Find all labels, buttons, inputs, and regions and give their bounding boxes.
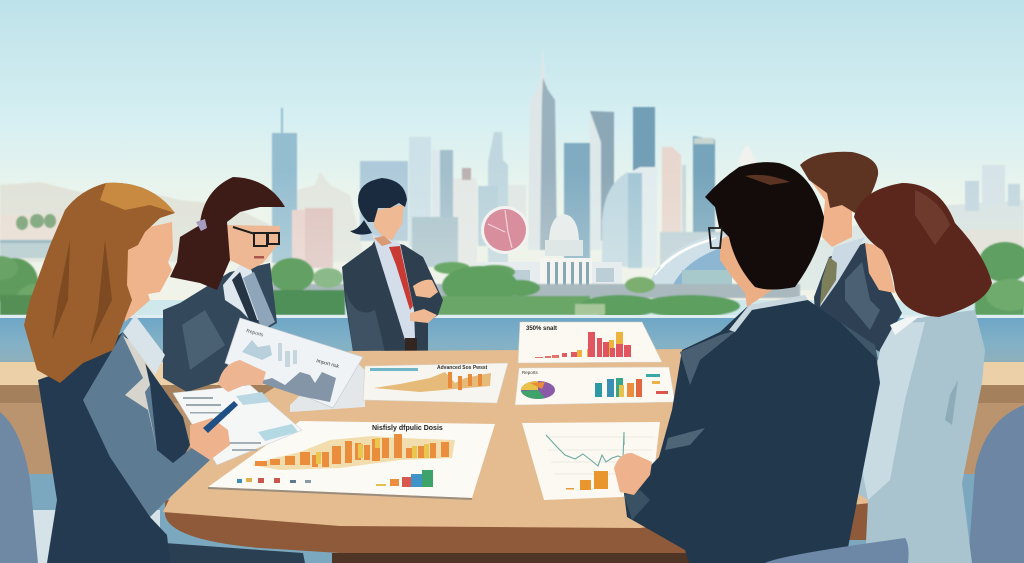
collar bbox=[729, 295, 808, 332]
chart sheet: line chart bbox=[522, 422, 660, 500]
hair bbox=[800, 152, 878, 213]
right chair bbox=[968, 405, 1024, 563]
chart sheet: area and line report bbox=[225, 318, 363, 408]
hand bbox=[614, 453, 652, 495]
chart sheet: large monthly bars: Nisfisly dfpulic Dosis bbox=[372, 425, 443, 432]
chart sheet: pie and bars bbox=[515, 367, 675, 405]
center presenter bbox=[342, 178, 443, 352]
glasses bbox=[233, 227, 279, 246]
chart sheet: 350% bars: 350% snalt bbox=[526, 326, 557, 332]
chart sheet: large monthly bars bbox=[208, 421, 495, 500]
sleeve bbox=[83, 332, 210, 517]
face bbox=[865, 243, 895, 293]
glass dome building bbox=[648, 235, 732, 287]
back counter bbox=[0, 362, 1024, 563]
front chair back bbox=[765, 538, 909, 563]
head bbox=[370, 204, 404, 240]
left woman with long hair bbox=[24, 183, 238, 563]
chart sheet: area and line report: Import risk bbox=[315, 358, 340, 370]
hands bbox=[410, 280, 438, 323]
collar bbox=[123, 315, 165, 375]
shirt bbox=[372, 234, 415, 340]
jacket bbox=[342, 238, 443, 352]
face and neck bbox=[125, 222, 173, 322]
chart sheet: 350% bars bbox=[518, 322, 662, 363]
jacket bbox=[814, 243, 902, 352]
wall clock dial bbox=[481, 206, 529, 254]
hair bbox=[170, 177, 285, 290]
right man seen from behind bbox=[614, 162, 880, 563]
shirt and grey tie bbox=[223, 262, 272, 320]
pie chart bbox=[521, 381, 555, 399]
chart sheet: pie and bars: Reports bbox=[522, 370, 539, 375]
black hair bbox=[705, 162, 824, 290]
chart sheet: note sheet under pen bbox=[173, 385, 302, 465]
jacket bbox=[38, 332, 190, 563]
hair bbox=[854, 183, 992, 317]
skyline haze bbox=[0, 170, 1024, 295]
chart sheet: advanced bar sheet bbox=[363, 363, 508, 403]
round table bbox=[163, 349, 870, 563]
window rail bbox=[0, 315, 1024, 363]
face and neck bbox=[810, 180, 852, 247]
woman with glasses bbox=[163, 177, 285, 392]
neck and ear bbox=[720, 225, 772, 307]
chart sheet: area and line report: Reports bbox=[245, 328, 264, 339]
pale jacket bbox=[852, 310, 985, 563]
city skyline bbox=[0, 47, 1024, 290]
right woman in pale jacket bbox=[852, 183, 992, 563]
face bbox=[225, 225, 280, 270]
hand holding report bbox=[218, 360, 266, 392]
stacked papers under report bbox=[290, 352, 365, 412]
dark hair bbox=[358, 178, 407, 222]
jacket bbox=[163, 263, 277, 392]
hand and pen bbox=[190, 418, 230, 460]
seated legs under table bbox=[165, 543, 305, 563]
capitol building bbox=[477, 214, 622, 288]
red tie bbox=[389, 246, 413, 310]
glasses bbox=[709, 228, 722, 248]
sky background bbox=[0, 0, 1024, 300]
patterned tie bbox=[820, 257, 837, 305]
back man in suit bbox=[800, 152, 902, 352]
chart sheet: advanced bar sheet: Advanced Sos Pwsst bbox=[437, 365, 488, 371]
hair bbox=[24, 183, 175, 383]
left chair bbox=[0, 412, 38, 563]
shirt bbox=[820, 237, 865, 307]
dark suit bbox=[624, 298, 880, 563]
trees and bridge bbox=[0, 214, 1024, 317]
